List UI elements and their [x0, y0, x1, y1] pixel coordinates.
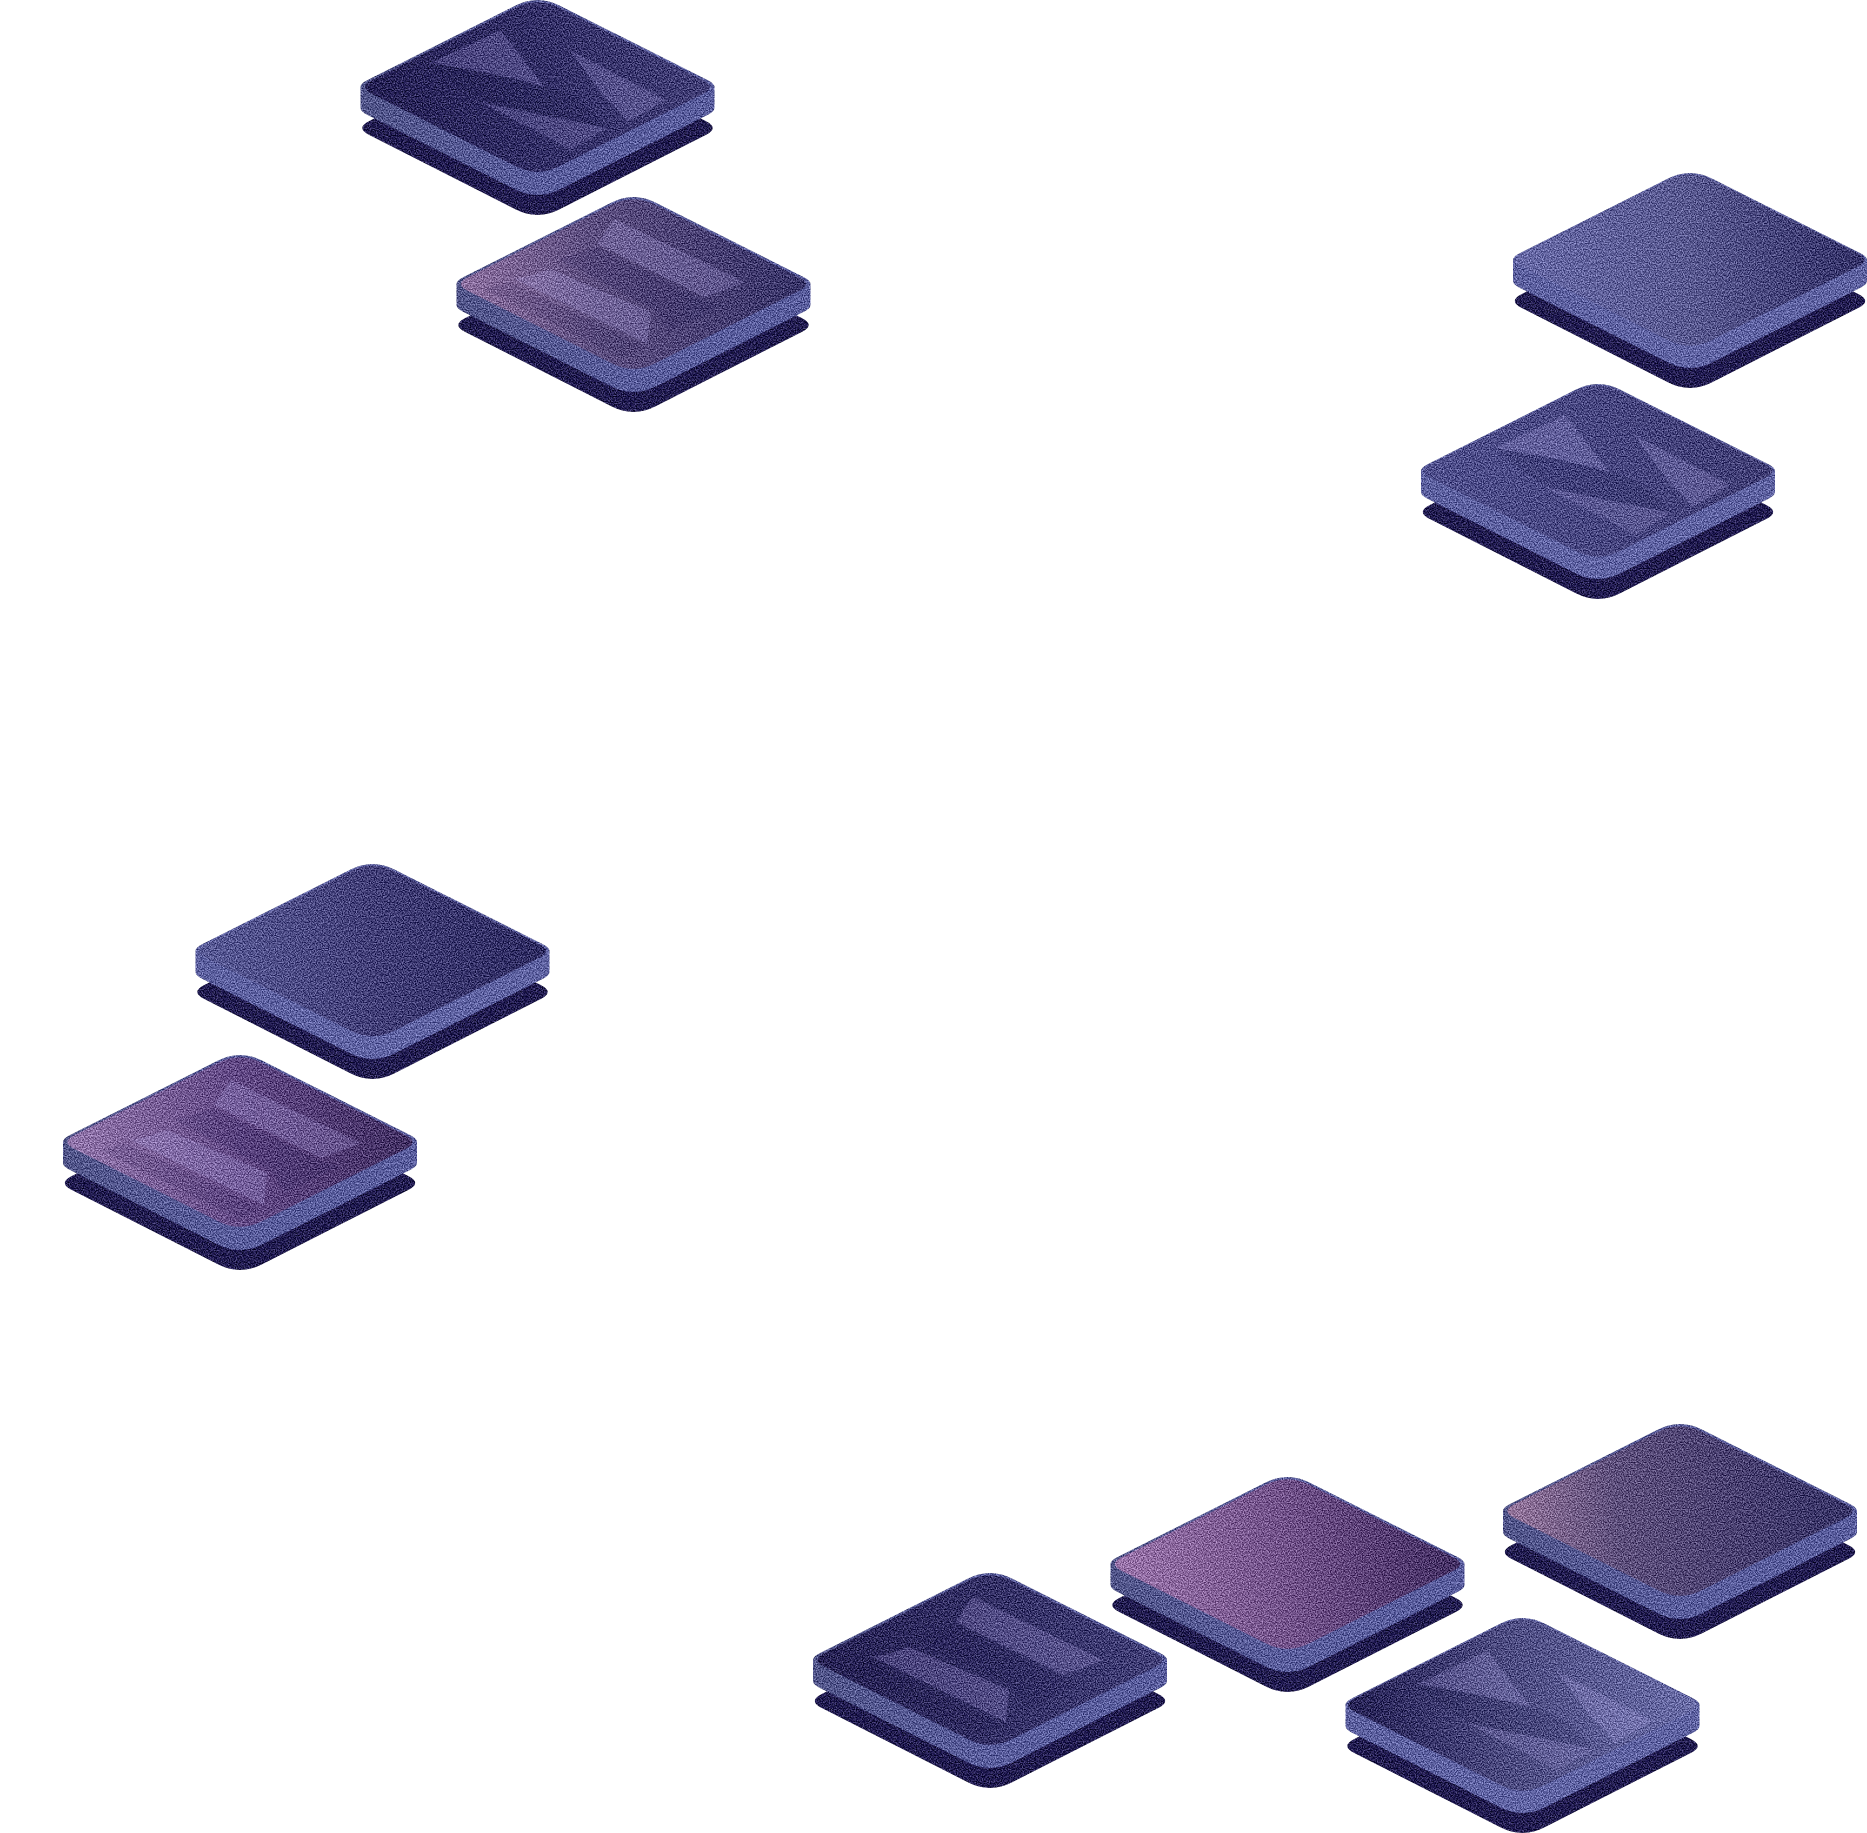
tile shadow: [815, 1614, 1165, 1788]
tile shadow: [1515, 214, 1865, 388]
letter I: [842, 1597, 1103, 1737]
tile surface: [1348, 1619, 1697, 1791]
tile rim: [1346, 1618, 1700, 1813]
tile rim: [63, 1055, 417, 1250]
tile rim: [1503, 1424, 1857, 1619]
tile surface: [817, 1575, 1163, 1745]
tile shadow: [65, 1096, 415, 1270]
tile shadow: [1505, 1465, 1855, 1639]
tile rim: [1421, 384, 1775, 579]
tile: blank indigo, left: [196, 864, 550, 1079]
tile: M dark, top left: [360, 0, 714, 215]
tile rim: [360, 0, 714, 195]
tile: blank purple, bottom: [1110, 1477, 1464, 1692]
tile: M light, bottom right: [1346, 1618, 1700, 1833]
tile surface: [1516, 174, 1864, 346]
tile surface: [461, 199, 806, 369]
tile rim: [813, 1573, 1167, 1768]
letter I: [100, 1080, 361, 1220]
letter I: [484, 219, 744, 359]
tile surface: [1507, 1426, 1853, 1596]
tile surface: [67, 1057, 413, 1227]
tile rim: [1513, 173, 1867, 368]
tile shadow: [362, 41, 713, 215]
letter M: [430, 30, 666, 150]
tile: I purple, left: [63, 1055, 417, 1270]
tile rim: [196, 864, 550, 1059]
tile rim: [456, 197, 810, 392]
tile shadow: [458, 238, 809, 412]
tile: I purple fade: [456, 197, 810, 412]
tile shadow: [1112, 1518, 1463, 1692]
letter M: [1418, 1651, 1652, 1771]
tile: blank purple fade, bottom right: [1503, 1424, 1857, 1639]
tile: M blue, right: [1421, 384, 1775, 599]
tile shadow: [1347, 1659, 1698, 1833]
tile surface: [365, 2, 710, 172]
tile surface: [199, 866, 546, 1036]
letter M: [1495, 415, 1730, 535]
tile shadow: [197, 905, 548, 1079]
tile rim: [1110, 1477, 1464, 1672]
tile surface: [1424, 385, 1772, 557]
tile: I dark, bottom: [813, 1573, 1167, 1788]
tile surface: [1115, 1479, 1460, 1649]
tile shadow: [1423, 425, 1773, 599]
tile: blank blue, top right: [1513, 173, 1867, 388]
